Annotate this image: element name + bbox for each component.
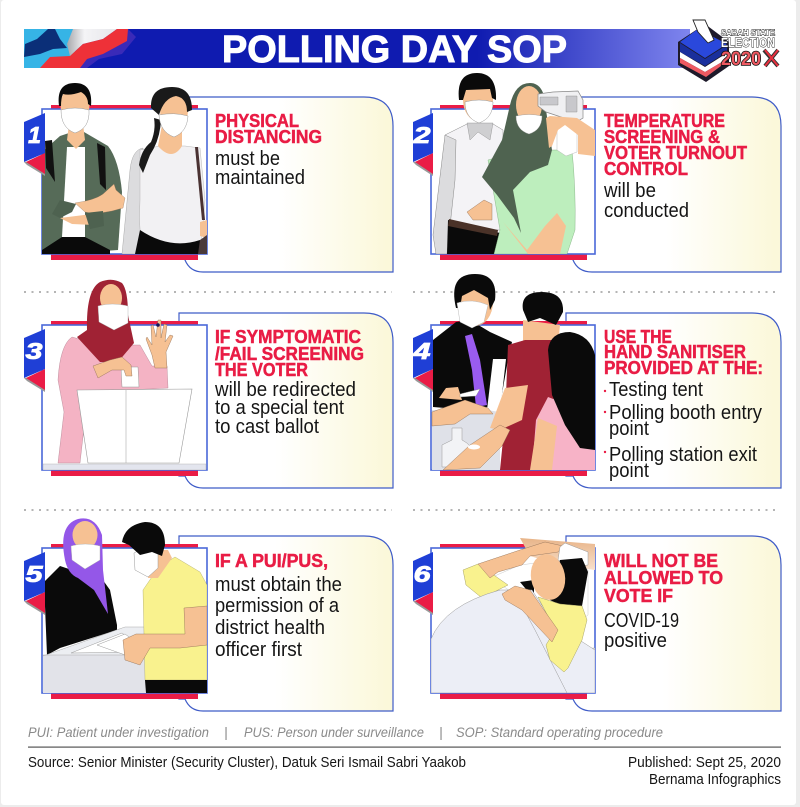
badge: number 2: 2 [412,122,431,148]
text: use the hand sanitiser: HAND SANITISER [604,342,746,362]
glossary note: | [224,724,228,740]
illustration: hand sanitiser at polling station [432,274,595,470]
glossary note: PUI: Patient under investigation [28,724,209,740]
divider: row 2 [24,509,780,511]
publication credit: Bernama Infographics [649,771,781,788]
icon: Sabah flag wave [24,29,136,68]
panel 4: hand sanitiser [412,274,781,488]
illustration: voter casting ballot [43,280,206,470]
glossary note [28,724,663,740]
text: PUI or PUS permission: permission of a [215,594,340,617]
text: use the hand sanitiser: USE THE [604,327,672,347]
text: temperature screening and voter turnout control: CONTROL [604,159,688,179]
divider: row 1 [24,291,780,293]
text: will not be allowed to vote: ALLOWED TO [604,568,723,588]
text: symptomatic voter redirected: to cast ballot [215,415,319,438]
panel 2: temperature screening [412,73,781,272]
title banner [24,29,690,71]
text: physical distancing: PHYSICAL [215,111,299,131]
badge: number 1: 1 [28,122,41,148]
glossary note: PUS: Person under surveillance [244,724,424,740]
badge: number 4: 4 [412,338,431,364]
illustration: temperature check at entrance [433,73,595,254]
panel 1: physical distancing [24,83,393,272]
badge: number 5 [24,552,45,615]
list: sanitiser locations [604,378,763,482]
text: will not be allowed to vote: WILL NOT BE [604,551,718,571]
illustration: officer and voter at desk [43,518,207,693]
text: temperature screening and voter turnout control: conducted [604,199,689,222]
banner heading: POLLING DAY SOP [222,29,567,71]
text: will not be allowed to vote: VOTE IF [604,586,673,606]
text: use the hand sanitiser: PROVIDED AT THE: [604,358,763,378]
source line: Source: Senior Minister (Security Cluster), Datuk Seri Ismail Sabri Yaakob [28,754,466,771]
list: sanitiser locations: Polling booth entry [609,401,763,424]
list: sanitiser locations: point [609,417,649,440]
badge: number 6: 6 [414,561,431,587]
text: symptomatic voter redirected: to a special tent [215,396,344,419]
text: symptomatic voter redirected: THE VOTER [215,360,308,380]
list: sanitiser locations: Testing tent [609,378,703,401]
badge: number 4 [412,329,433,392]
text: use the hand sanitiser [604,327,763,482]
text: temperature screening and voter turnout control: will be [603,179,656,202]
logo: Sabah State Election 2020: ELECTION [721,35,775,50]
list: sanitiser locations: Polling station exit [609,443,757,466]
text: PUI or PUS permission: must obtain the [215,573,342,596]
text: PUI or PUS permission: officer first [215,638,302,661]
illustration: man and woman with masks [42,83,207,254]
text: physical distancing: must be [215,147,280,170]
list: sanitiser locations: point [609,459,649,482]
text: PUI or PUS permission [215,551,342,661]
text: temperature screening and voter turnout control: SCREENING & [604,127,720,147]
text: temperature screening and voter turnout control: VOTER TURNOUT [604,143,747,163]
text: will not be allowed to vote [604,551,723,652]
text: symptomatic voter redirected: will be redirected [214,378,356,401]
badge: number 3 [24,329,45,392]
badge: number 3: 3 [26,338,43,364]
panel 5: PUI and PUS permission [24,518,393,711]
publication credit: Published: Sept 25, 2020 [628,754,781,771]
text: symptomatic voter redirected: IF SYMPTOMATIC [215,327,361,347]
text: PUI or PUS permission: IF A PUI/PUS, [215,551,328,571]
text: temperature screening and voter turnout control: TEMPERATURE [604,111,725,131]
text: PUI or PUS permission: district health [215,616,325,639]
text: physical distancing: DISTANCING [215,127,322,147]
glossary note: SOP: Standard operating procedure [456,724,663,740]
illustration: sick person lying in bed [431,538,595,693]
badge: number 6 [413,552,433,615]
badge: number 1 [24,113,45,176]
text: physical distancing: maintained [215,166,305,189]
text: symptomatic voter redirected [214,327,364,438]
badge: number 2 [412,113,433,176]
text: symptomatic voter redirected: /FAIL SCREENING [215,344,364,364]
glossary note: | [439,724,443,740]
logo: Sabah State Election 2020: 2020 [721,49,761,70]
text: will not be allowed to vote: COVID-19 [604,609,679,632]
panel 3: symptomatic voters [24,280,393,488]
panel 6: not allowed to vote [413,536,781,711]
text: will not be allowed to vote: positive [604,629,667,652]
badge: number 5: 5 [26,561,44,587]
publication credit [628,754,781,788]
logo: Sabah State Election 2020 [678,20,778,82]
logo: Sabah State Election 2020: SABAH STATE [721,28,775,38]
text: temperature screening and voter turnout control [603,111,747,222]
text: physical distancing [215,111,322,189]
